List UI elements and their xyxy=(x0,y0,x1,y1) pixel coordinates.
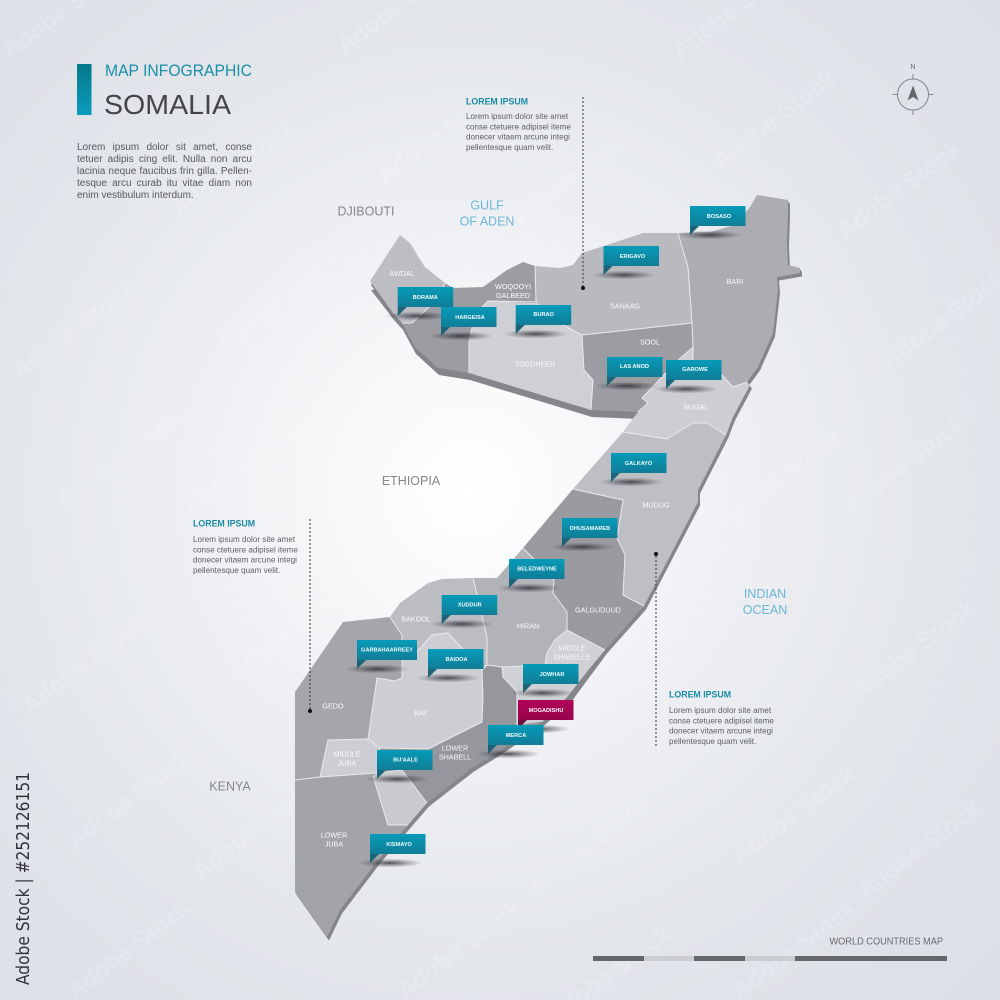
text: Adobe Stock xyxy=(187,775,321,885)
region: Lower Shabelle xyxy=(380,665,542,803)
flag: Bu'aale: BU'AALE xyxy=(393,758,418,764)
flag: Merca xyxy=(476,725,544,758)
callout: top: LOREM IPSUM xyxy=(466,96,528,106)
map credit: WORLD COUNTRIES MAP xyxy=(830,936,943,948)
accent bar xyxy=(77,64,92,115)
text: Adobe Stock xyxy=(212,245,346,355)
text: Adobe Stock xyxy=(837,410,971,520)
callout: left: Lorem ipsum dolor site amet xyxy=(193,535,296,544)
region labels: JUBA xyxy=(325,840,343,848)
flag: Mogadishu: MOGADISHU xyxy=(529,708,563,714)
region: Lower Juba xyxy=(295,773,408,937)
text: Adobe Stock xyxy=(372,80,506,190)
label: Ethiopia: ETHIOPIA xyxy=(382,474,441,488)
flag: Baidoa: BAIDOA xyxy=(445,657,468,663)
title: SOMALIA xyxy=(104,89,231,120)
region labels: HIRAN xyxy=(517,622,539,630)
flag: Galkayo xyxy=(599,453,666,486)
callout: top: Lorem ipsum dolor site amet xyxy=(466,112,569,121)
region: Awdal xyxy=(370,235,445,323)
icon: compass xyxy=(892,64,934,115)
flag: Dhusamareb: DHUSAMAREB xyxy=(570,526,610,532)
region labels: SOOL xyxy=(640,338,660,346)
label: Indian Ocean: OCEAN xyxy=(743,603,787,617)
region labels: MUDUG xyxy=(642,500,670,510)
label: Gulf of Aden: GULF xyxy=(470,198,504,212)
flag: Kismayo xyxy=(358,834,426,868)
text: Adobe Stock xyxy=(62,745,196,855)
region labels: GEDO xyxy=(322,702,344,710)
flag: Dhusamareb xyxy=(550,518,618,552)
text: Adobe Stock xyxy=(17,610,151,720)
flag: Borama: BORAMA xyxy=(413,295,438,301)
text: Adobe Stock xyxy=(507,120,641,230)
flag: Garowe: GAROWE xyxy=(682,367,708,373)
callout: right: LOREM IPSUM xyxy=(669,690,731,700)
flag: Hargeisa: HARGEISA xyxy=(455,315,485,321)
region labels: MIDDLE xyxy=(558,644,586,652)
callout: left: donecer vitaem arcune integi xyxy=(193,556,297,565)
label: Gulf of Aden: OF ADEN xyxy=(460,214,514,228)
flag: Xuddur: XUDDUR xyxy=(458,602,482,608)
flag: Borama xyxy=(386,287,453,320)
label: Indian Ocean: INDIAN xyxy=(744,587,786,601)
text: Adobe Stock xyxy=(177,410,311,520)
text: Adobe Stock xyxy=(522,790,656,900)
callout: right: pellentesque quam velit. xyxy=(669,737,756,746)
region: Nugal xyxy=(623,347,750,439)
flag: Bosaso xyxy=(678,206,746,240)
region: Galguduud xyxy=(523,489,644,650)
region labels: WOQOOYI xyxy=(495,282,531,291)
region: Gedo xyxy=(295,617,402,780)
flag: Bosaso: BOSASO xyxy=(707,214,732,220)
text: Adobe Stock xyxy=(52,405,186,515)
flag: Mogadishu xyxy=(506,700,574,734)
flag: Erigavo xyxy=(592,246,659,280)
region: Sool xyxy=(582,323,693,412)
callout: top xyxy=(466,96,585,290)
region: Bay xyxy=(368,633,483,749)
region labels: LOWER xyxy=(442,744,468,752)
text: Adobe Stock xyxy=(847,595,981,705)
flag: Bu'aale xyxy=(365,750,432,784)
flag: Garowe xyxy=(654,360,722,394)
region: Middle Juba xyxy=(320,739,380,777)
intro text: lacinia neque faucibus frin gilla. Pellen- xyxy=(77,166,252,177)
text: Adobe Stock xyxy=(832,135,966,245)
text: Adobe Stock xyxy=(707,65,841,175)
text: Adobe Stock xyxy=(167,115,301,225)
flag: Xuddur xyxy=(430,595,497,628)
callout: right xyxy=(654,552,774,747)
intro text: tesque arcu curab itu vitae diam non xyxy=(77,178,252,189)
callout: right: donecer vitaem arcune integi xyxy=(669,727,773,736)
region: Middle Shabelle xyxy=(502,630,605,725)
flag: Las Anod: LAS ANOD xyxy=(620,364,649,370)
intro text: enim vestibulum interdum. xyxy=(77,190,194,201)
callout: right: conse ctetuere adipisel iteme xyxy=(669,716,774,725)
region: Mudug xyxy=(573,423,726,606)
icon: compass: N xyxy=(910,64,916,71)
region: Sanaag xyxy=(535,233,692,335)
region labels: SHABELL xyxy=(439,752,471,762)
intro text: Lorem ipsum dolor sit amet, conse xyxy=(77,142,252,153)
callout: right: Lorem ipsum dolor site amet xyxy=(669,706,772,715)
region: Woqooyi Galbeed xyxy=(402,262,536,373)
flag: Hargeisa xyxy=(429,307,496,340)
region labels: TOGDHEER xyxy=(515,360,555,368)
scale bar xyxy=(593,956,947,961)
region: Middle Juba south xyxy=(373,770,427,825)
region labels: JUBA xyxy=(338,758,356,768)
flag: Beledweyne: BELEDWEYNE xyxy=(517,566,557,572)
text: Adobe Stock xyxy=(7,275,141,385)
flag: Jowhar: JOWHAR xyxy=(540,672,564,678)
region labels: SANAAG xyxy=(610,302,640,310)
region labels: GALGUDUUD xyxy=(575,606,621,614)
region labels: SHABELLE xyxy=(553,652,591,662)
flag: Burao: BURAO xyxy=(533,312,555,318)
flag: Las Anod xyxy=(595,357,662,390)
intro text: tetuer adipis cing elit. Nulla non arcu xyxy=(77,154,252,165)
callout: top: conse ctetuere adipisel iteme xyxy=(466,122,571,131)
region labels: GALBEED xyxy=(496,291,530,300)
region labels: BAKOOL xyxy=(401,614,431,624)
region labels: BAY xyxy=(414,708,428,718)
text: Adobe Stock xyxy=(222,575,356,685)
flag: Merca: MERCA xyxy=(506,733,526,739)
region: Bari xyxy=(678,195,800,387)
region labels: MIDDLE xyxy=(333,750,361,758)
subtitle: MAP INFOGRAPHIC xyxy=(105,62,252,80)
callout: left: LOREM IPSUM xyxy=(193,518,255,528)
callout: left xyxy=(193,518,312,713)
flag: Garbahaarreey xyxy=(345,640,417,674)
flag: Jowhar xyxy=(511,664,578,698)
flag: Beledweyne xyxy=(497,559,564,592)
region: Togdheer xyxy=(469,301,593,410)
text: Adobe Stock xyxy=(712,425,846,535)
region labels xyxy=(321,269,743,848)
callout: top: pellentesque quam velit. xyxy=(466,143,553,152)
text: Adobe Stock xyxy=(382,415,516,525)
text: Adobe Stock xyxy=(852,795,986,905)
region labels: AWDAL xyxy=(389,269,415,278)
region labels: BARI xyxy=(727,277,743,286)
flag: Galkayo: GALKAYO xyxy=(625,461,653,467)
label: Kenya: KENYA xyxy=(209,780,251,794)
flag: Erigavo: ERIGAVO xyxy=(620,254,646,260)
flag: Garbahaarreey: GARBAHAARREEY xyxy=(361,648,413,654)
callout: top: donecer vitaem arcune integi xyxy=(466,133,570,142)
flag: Burao xyxy=(504,305,571,338)
stock credit: Adobe Stock | #252126151 xyxy=(13,772,34,985)
label: Djibouti: DJIBOUTI xyxy=(338,204,394,218)
callout: left: pellentesque quam velit. xyxy=(193,566,280,575)
region: Bakool xyxy=(390,578,487,670)
region: Hiran xyxy=(473,548,567,667)
flag: Kismayo: KISMAYO xyxy=(386,842,412,848)
region labels: LOWER xyxy=(321,830,347,840)
flag: Baidoa xyxy=(416,649,484,682)
region labels: NUGAL xyxy=(684,402,708,412)
text: Adobe Stock xyxy=(727,760,861,870)
callout: left: conse ctetuere adipisel iteme xyxy=(193,545,298,554)
map: Somalia xyxy=(295,195,802,940)
intro text xyxy=(77,142,252,201)
